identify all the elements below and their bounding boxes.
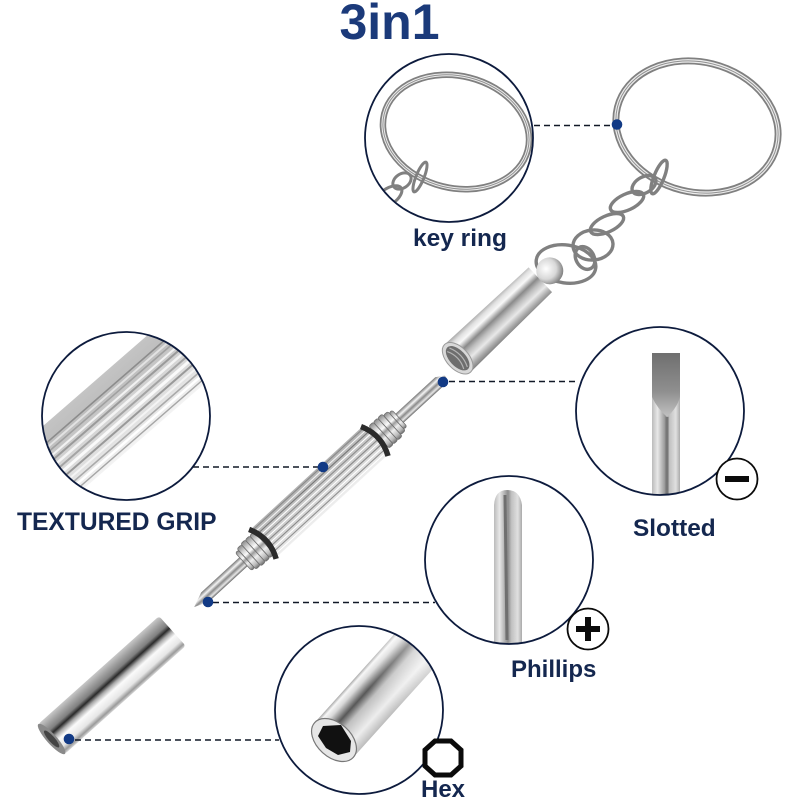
icon: slotted minus badge <box>716 458 758 500</box>
callout dots <box>64 119 622 744</box>
lower shaft and phillips tip <box>190 553 252 612</box>
chain links <box>534 158 670 287</box>
panel: hex tip zoom <box>275 626 443 794</box>
lower black o-ring <box>249 526 280 559</box>
key ring product illustration <box>534 44 792 287</box>
callout lines <box>75 126 612 740</box>
label: textured grip: TEXTURED GRIP <box>17 509 216 536</box>
lower cap tube <box>35 616 186 757</box>
label: slotted: Slotted <box>633 515 716 542</box>
panel: phillips tip zoom <box>425 476 593 645</box>
label: key ring: key ring <box>413 225 507 252</box>
panel: slotted tip zoom <box>576 327 744 496</box>
screwdriver with textured grip <box>181 362 459 622</box>
lower spring <box>233 532 274 573</box>
knurled grip body <box>253 425 390 555</box>
upper cap tube <box>437 248 573 380</box>
panel: textured grip zoom <box>41 331 211 501</box>
upper black o-ring <box>361 423 392 456</box>
icon: hex octagon badge <box>425 741 461 775</box>
icon: split key ring <box>602 44 792 210</box>
upper spring <box>369 407 410 448</box>
upper shaft and slotted tip <box>391 372 449 427</box>
panel: key ring zoom <box>365 54 541 222</box>
label: phillips: Phillips <box>511 656 596 683</box>
icon: phillips plus badge <box>568 608 608 650</box>
